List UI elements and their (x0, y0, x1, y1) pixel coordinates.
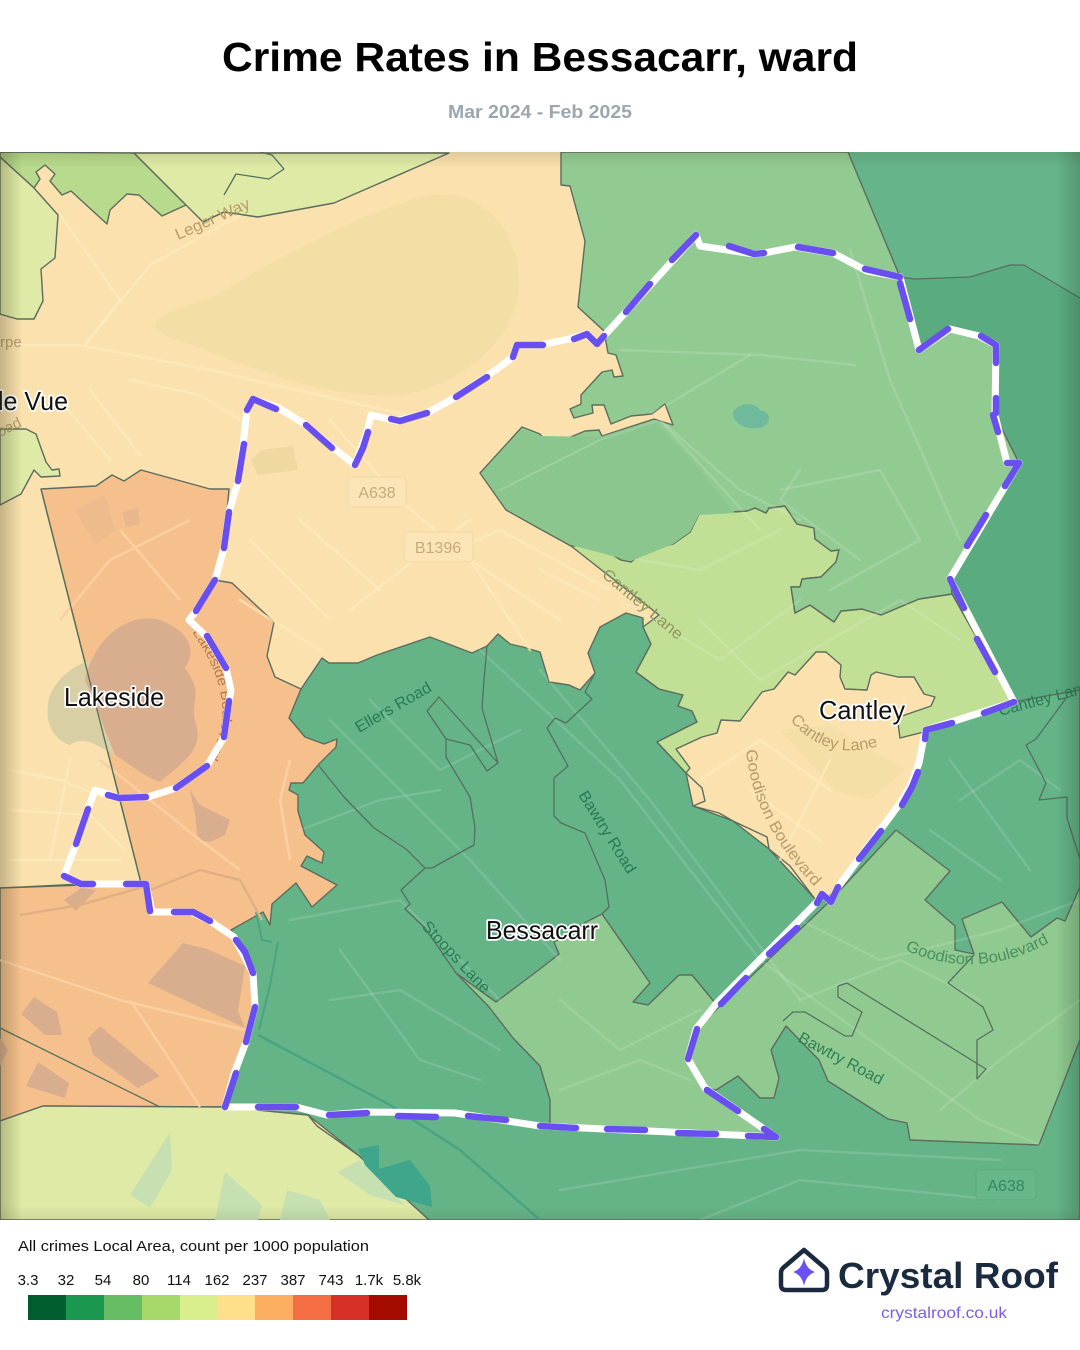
region: north-west green wedge (0, 152, 186, 224)
icon: house with star (781, 1250, 827, 1290)
road label: Leger Way: Leger Way (173, 196, 253, 244)
forest shading (482, 420, 735, 561)
road shield: A638 south: A638 (987, 1178, 1025, 1195)
legend colour ramp (28, 1295, 407, 1320)
title: Crime Rates in Bessacarr, ward (222, 34, 858, 80)
place label: Cantley: Cantley (819, 695, 905, 725)
roads: cream areas (0, 215, 830, 860)
place label: Lakeside: Lakeside (64, 682, 164, 712)
logo url: crystalroof.co.uk (881, 1305, 1008, 1322)
road shield: B1396 (404, 532, 473, 562)
road label: Cantley Lane north: Cantley Lane (598, 566, 686, 643)
region: Cantley yellow-green (571, 506, 1013, 773)
orange patches (0, 495, 245, 1098)
road shield: A638 south (976, 1170, 1036, 1200)
legend scale labels: 387 (280, 1272, 306, 1289)
teal patch and waterways (358, 1145, 432, 1207)
legend scale labels: 237 (242, 1272, 268, 1289)
logo: Crystal Roof (781, 1250, 1059, 1322)
region: south light green lobe (456, 914, 776, 1137)
region: south-east light green (688, 830, 1080, 1145)
legend scale labels: 5.8k (393, 1272, 422, 1289)
road shield: B1396: B1396 (415, 540, 461, 557)
Cantley shaded block (780, 725, 905, 800)
road label: Stoops Lane: Stoops Lane (418, 918, 493, 997)
legend scale labels: 114 (167, 1272, 191, 1289)
legend title: All crimes Local Area, count per 1000 population (18, 1238, 369, 1255)
map edge vignette (0, 152, 1080, 1220)
region: east dark green (900, 265, 1080, 720)
place label: Belle Vue: le Vue (0, 386, 68, 416)
roads: green areas (290, 250, 1080, 1220)
inner boundaries (0, 152, 1080, 1107)
Lakeside lake and shopping area (85, 618, 198, 782)
road label: Cantley Lane south: Cantley Lane (792, 715, 877, 751)
legend scale labels: 80 (133, 1272, 149, 1289)
pale patches south-west (130, 1132, 405, 1220)
region: central and southern green (224, 613, 1080, 1220)
map panel (0, 152, 1080, 1220)
road label: Bawtry Road south: Bawtry Road (795, 1030, 886, 1089)
subtitle: date range: Mar 2024 - Feb 2025 (448, 102, 632, 122)
road label: Goodison Boulevard Cantley: Goodison Boulevard (746, 750, 822, 886)
legend scale labels: 1.7k (355, 1272, 384, 1289)
road shield: A638 north (348, 477, 406, 507)
building patch (251, 446, 298, 475)
ward boundary: white line (64, 235, 1019, 1137)
legend scale labels: 162 (204, 1272, 230, 1289)
place label: Bessacarr: Bessacarr (486, 915, 598, 945)
legend scale labels: 743 (318, 1272, 344, 1289)
road label: Goodison Boulevard east: Goodison Boulevard (907, 932, 1048, 964)
legend (18, 1238, 422, 1320)
Lakeside lake left part (47, 660, 115, 755)
region: north pale green (134, 153, 449, 222)
ward boundary: purple dashes (64, 235, 1019, 1137)
road label: Bawtry Road north: Bawtry Road (575, 788, 639, 877)
cream base area (0, 152, 806, 1142)
legend scale labels (18, 1272, 422, 1289)
racecourse (155, 195, 519, 396)
region: west pale green (0, 157, 58, 319)
region: Cantley cream (676, 652, 935, 900)
region: Lakeside and Yorkshire Wildlife orange (0, 470, 337, 1121)
legend scale labels: 54 (95, 1272, 111, 1289)
region: north light green (480, 152, 1019, 622)
legend scale labels: 32 (58, 1272, 74, 1289)
road shield: A638 north: A638 (358, 485, 396, 502)
logo wordmark: Crystal Roof (838, 1255, 1059, 1296)
region: north-east dark green (848, 152, 1080, 298)
legend scale labels: 3.3 (18, 1272, 38, 1289)
road label: Ellers Road: Ellers Road (352, 679, 435, 736)
pond (733, 404, 769, 428)
road label fragments west (0, 334, 24, 441)
roads: orange areas (0, 520, 290, 1107)
road label: Lakeside Boulevard: Lakeside Boulevard (193, 631, 232, 762)
region: west-mid pale green (0, 429, 60, 505)
retail park patch (190, 790, 230, 842)
road label fragments west: rpe (0, 334, 22, 351)
region: south-west pale green (0, 1106, 429, 1220)
